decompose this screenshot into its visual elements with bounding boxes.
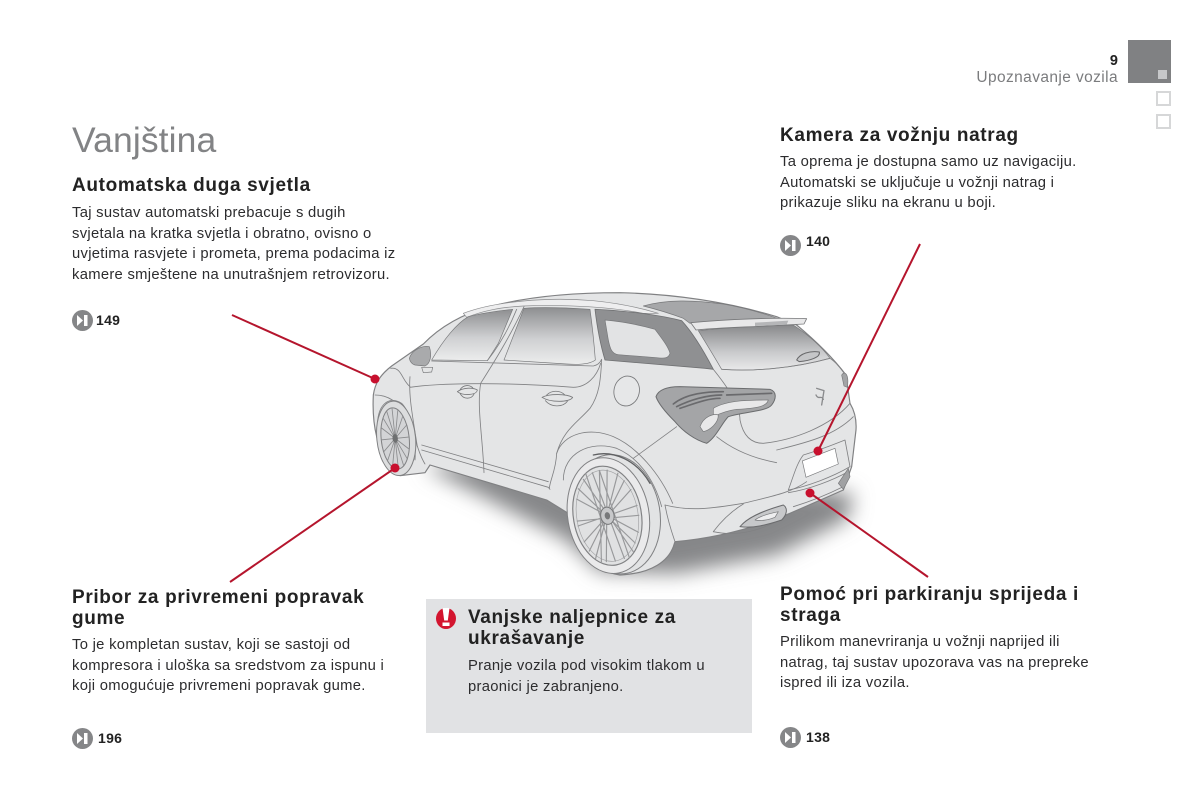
rear spoiler: [691, 318, 807, 330]
DS badge: [816, 388, 824, 405]
reference 140: 140: [806, 233, 830, 249]
reference 138: [780, 727, 830, 748]
door and body lines: [375, 307, 853, 542]
section: automatic high beam: Taj sustav automatski prebacuje s dugih: [72, 205, 346, 221]
page number and section name: [976, 53, 1118, 86]
exhaust trim: [740, 505, 786, 527]
section: automatic high beam: uvjetima rasvjete i prometa, prema podacima iz: [72, 246, 395, 262]
warning panel: exterior decals: Pranje vozila pod visokim tlakom u: [468, 658, 705, 674]
reference 149: [72, 310, 120, 331]
section: tyre repair kit: [72, 587, 384, 749]
car shadow: [423, 460, 853, 573]
reference 138: 138: [806, 729, 830, 745]
section: automatic high beam: [72, 175, 395, 331]
wheel arch over rear wheel: [593, 454, 650, 483]
roof rail: [463, 299, 658, 317]
callout line: automatic high beam: [232, 315, 380, 384]
exhaust right: [838, 468, 850, 489]
section: parking sensors: Pomoć pri parkiranju sprijeda i: [780, 584, 1079, 605]
rear wiper: [797, 352, 819, 362]
tail lamp: [656, 387, 775, 443]
section: tyre repair kit: gume: [72, 608, 125, 629]
reference 196: 196: [98, 730, 122, 746]
page number and section name: 9: [1110, 53, 1118, 69]
section: parking sensors: straga: [780, 605, 841, 626]
callout line: parking sensors: [806, 488, 928, 577]
reference 140: [780, 233, 830, 256]
rear side window: [504, 308, 595, 364]
roof panel: [643, 301, 778, 323]
rear wheel: [558, 448, 670, 582]
section: reversing camera: Ta oprema je dostupna samo uz navigaciju.: [780, 154, 1076, 170]
section: parking sensors: [780, 584, 1089, 748]
warning panel: exterior decals: [426, 599, 752, 733]
number plate: [802, 448, 838, 477]
section: automatic high beam: kamere smještene na unutrašnjem retrovizoru.: [72, 266, 390, 282]
car: [373, 293, 856, 582]
section: reversing camera: Kamera za vožnju natrag: [780, 125, 1019, 146]
section: parking sensors: Prilikom manevriranja u vožnji naprijed ili: [780, 634, 1060, 650]
warning panel: exterior decals: Vanjske naljepnice za: [468, 607, 676, 628]
reference 196: [72, 728, 122, 749]
section: parking sensors: natrag, taj sustav upozorava vas na prepreke: [780, 654, 1089, 670]
section: automatic high beam: Automatska duga svjetla: [72, 175, 311, 196]
section: tyre repair kit: Pribor za privremeni popravak: [72, 587, 364, 608]
section: tyre repair kit: koji omogućuje privremeni popravak gume.: [72, 678, 366, 694]
warning panel: exterior decals: ukrašavanje: [468, 628, 585, 649]
dark pillar: [595, 309, 713, 369]
callout line: reversing camera: [814, 244, 920, 456]
page number and section name: Upoznavanje vozila: [976, 69, 1118, 86]
rear window: [698, 325, 830, 370]
fuel flap: [611, 374, 642, 408]
front side window: [432, 309, 513, 361]
reference 149: 149: [96, 312, 120, 328]
section: parking sensors: ispred ili iza vozila.: [780, 675, 910, 691]
chapter tabs: [1128, 40, 1171, 129]
side lamp: [842, 373, 848, 387]
front wheel: [373, 399, 419, 477]
title: Vanjština: [72, 120, 216, 160]
icon: warning: [436, 608, 456, 629]
callout line: tyre repair kit: [230, 464, 400, 582]
quarter window: [605, 320, 670, 358]
section: tyre repair kit: To je kompletan sustav, koji se sastoji od: [72, 637, 350, 653]
car body: [373, 293, 856, 575]
section: tyre repair kit: kompresora i uloška sa sredstvom za ispunu i: [72, 658, 384, 674]
section: reversing camera: prikazuje sliku na ekranu u boji.: [780, 195, 996, 211]
section: reversing camera: [780, 125, 1076, 256]
section: automatic high beam: svjetala na kratka svjetla i obratno, ovisno o: [72, 226, 372, 242]
warning panel: exterior decals: praonici je zabranjeno.: [468, 678, 624, 694]
mirror: [409, 346, 431, 366]
door handles: [457, 386, 573, 406]
section: reversing camera: Automatski se uključuje u vožnji natrag i: [780, 174, 1054, 190]
